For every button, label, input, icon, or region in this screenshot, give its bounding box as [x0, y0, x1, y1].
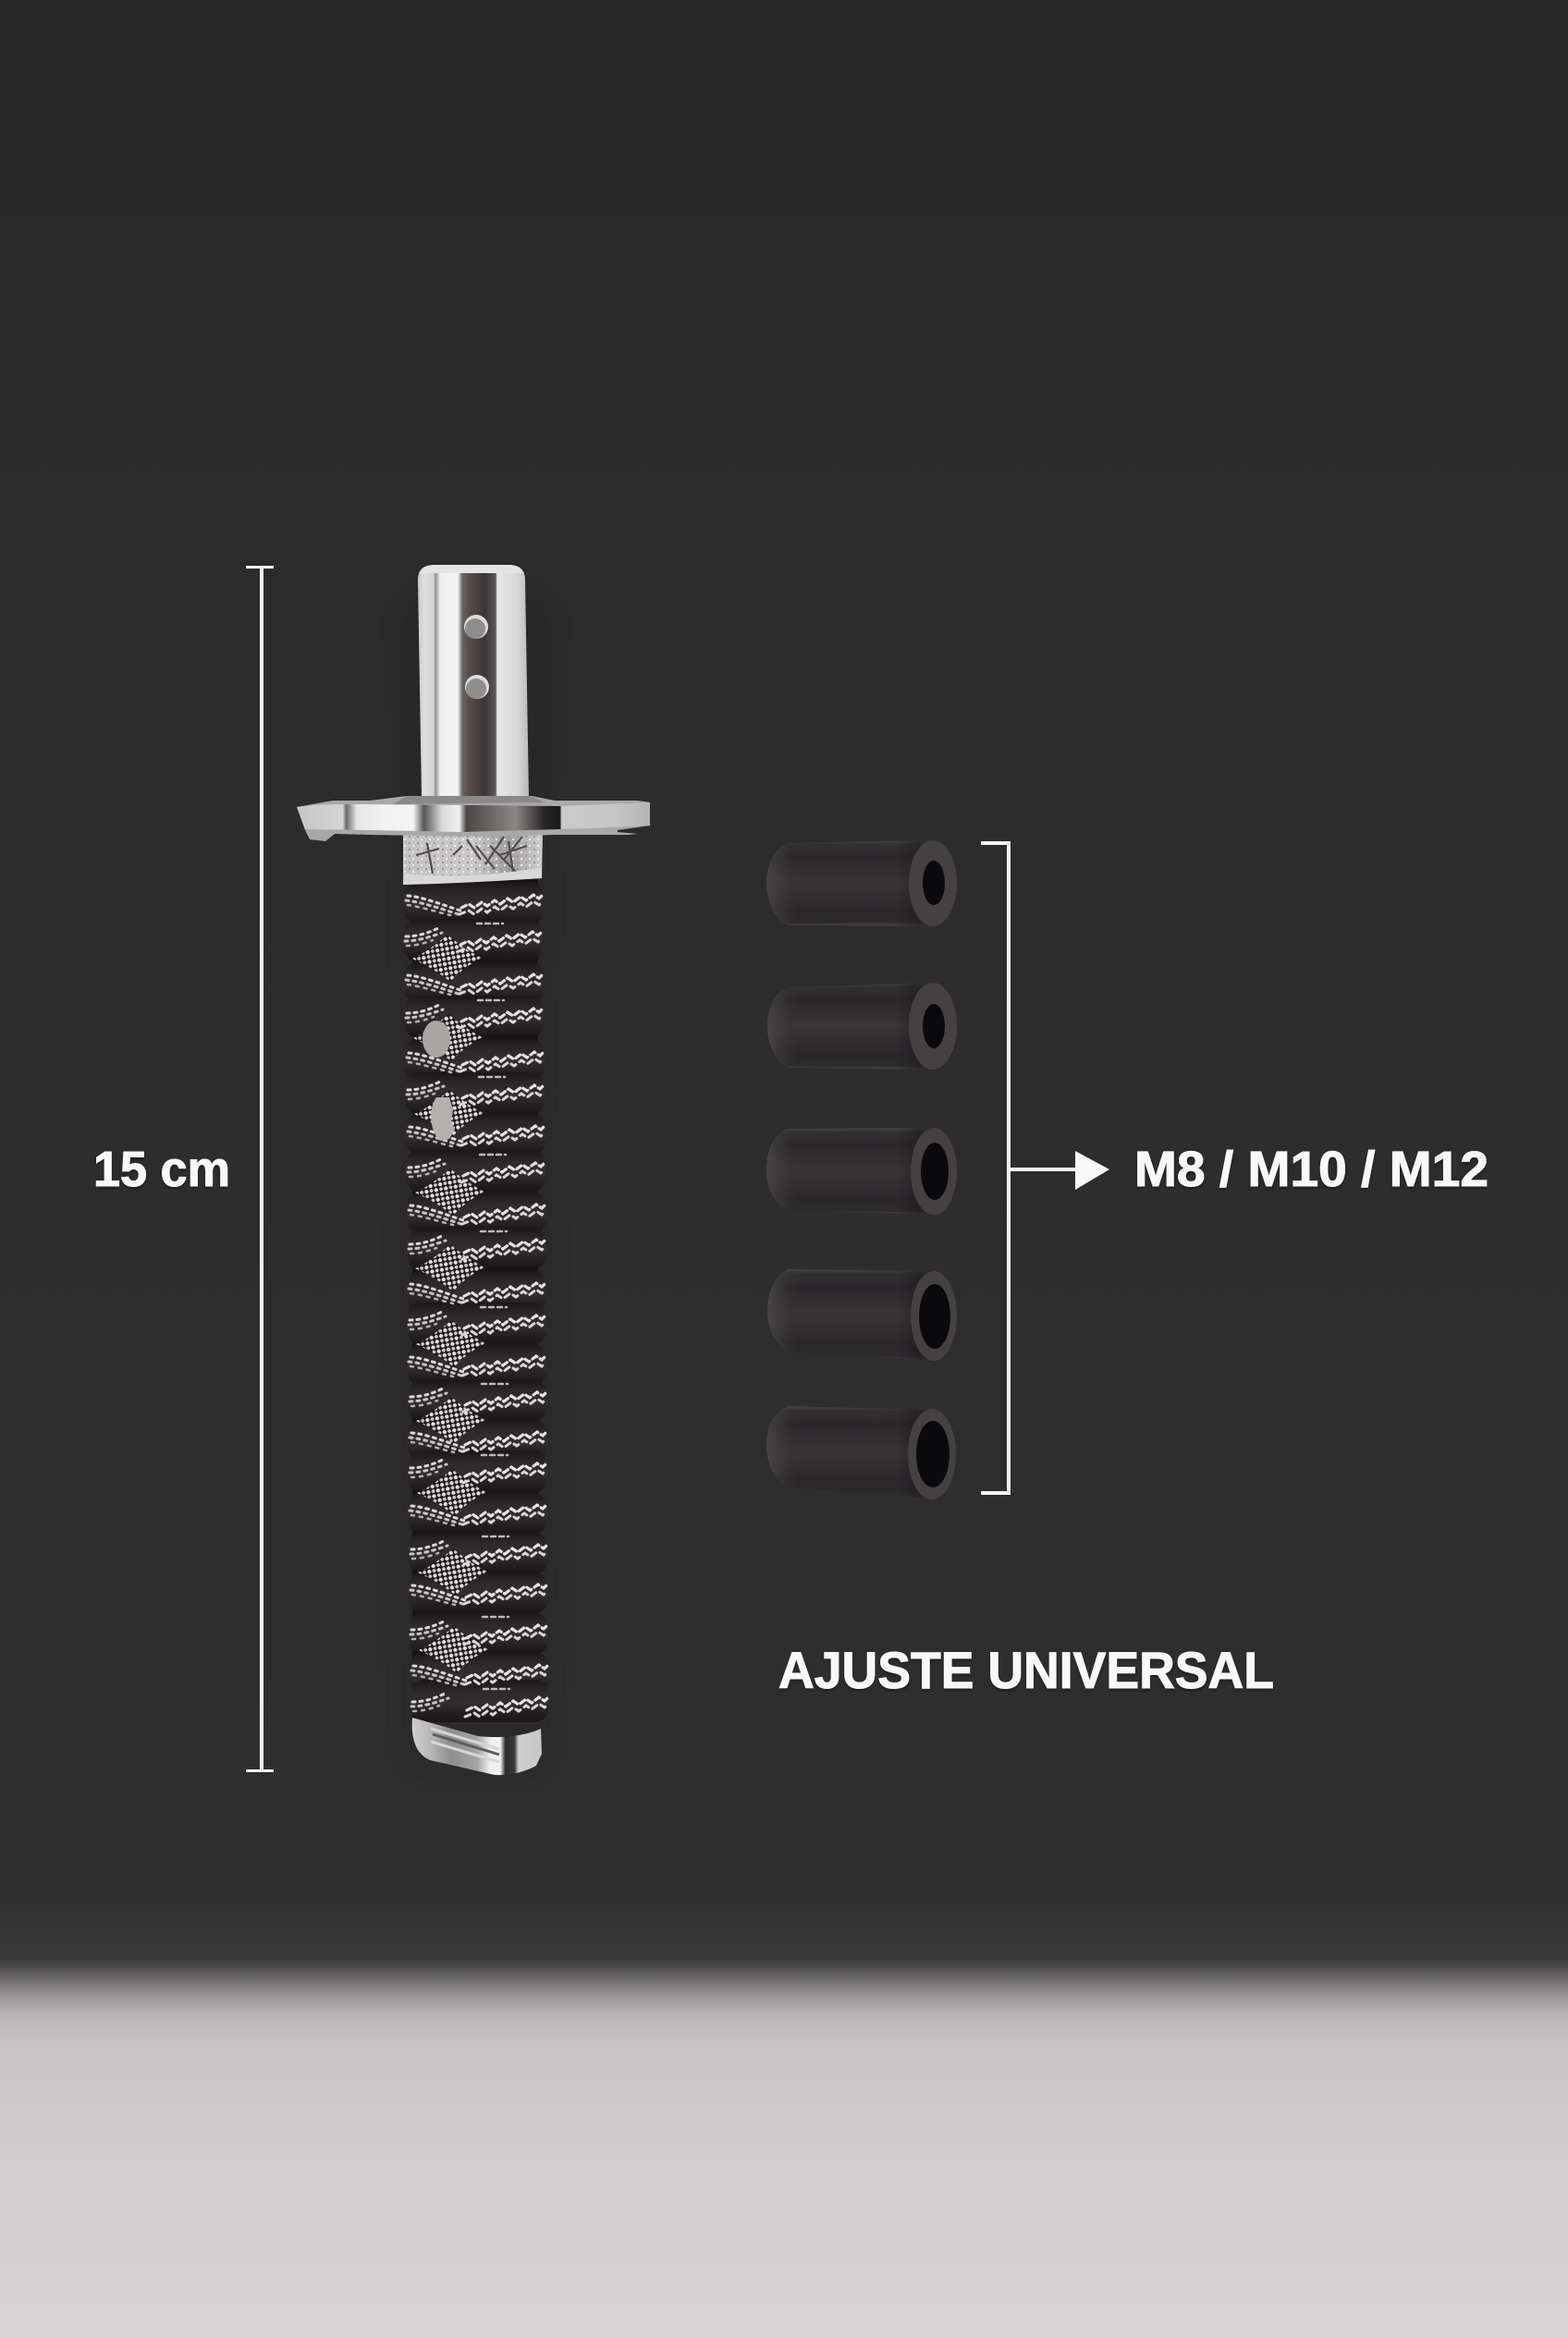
- tsuba guard: [297, 796, 650, 841]
- label: 15 cm: 15 cm: [93, 1142, 230, 1197]
- height dimension bracket: [246, 566, 274, 1772]
- diamond motifs: [412, 935, 488, 1673]
- menuki ornament upper: [423, 1021, 450, 1058]
- cord bands: [405, 895, 548, 1717]
- sleeve 1: [766, 840, 957, 926]
- label: universal fit: AJUSTE UNIVERSAL: [778, 1641, 1274, 1699]
- hole upper: [464, 615, 488, 639]
- menuki ornament lower: [431, 1097, 455, 1141]
- shaft: [418, 565, 529, 797]
- sleeve 4: [767, 1269, 957, 1361]
- sleeve 2: [767, 983, 957, 1070]
- collar: [403, 834, 543, 885]
- cord bumps: [403, 882, 549, 1722]
- product: katana shift knob: [297, 565, 650, 1780]
- sleeve 5: [766, 1406, 956, 1499]
- rubber adapter sleeves: [766, 840, 957, 1499]
- hole lower: [465, 675, 489, 699]
- grip wrap: [403, 878, 549, 1722]
- sleeves bracket: [981, 843, 1009, 1493]
- pommel cap: [412, 1718, 542, 1775]
- label: thread sizes: M8 / M10 / M12: [1134, 1142, 1488, 1197]
- handle shadow: [398, 592, 555, 1780]
- arrow: [1009, 1151, 1109, 1190]
- sleeve 3: [766, 1128, 957, 1215]
